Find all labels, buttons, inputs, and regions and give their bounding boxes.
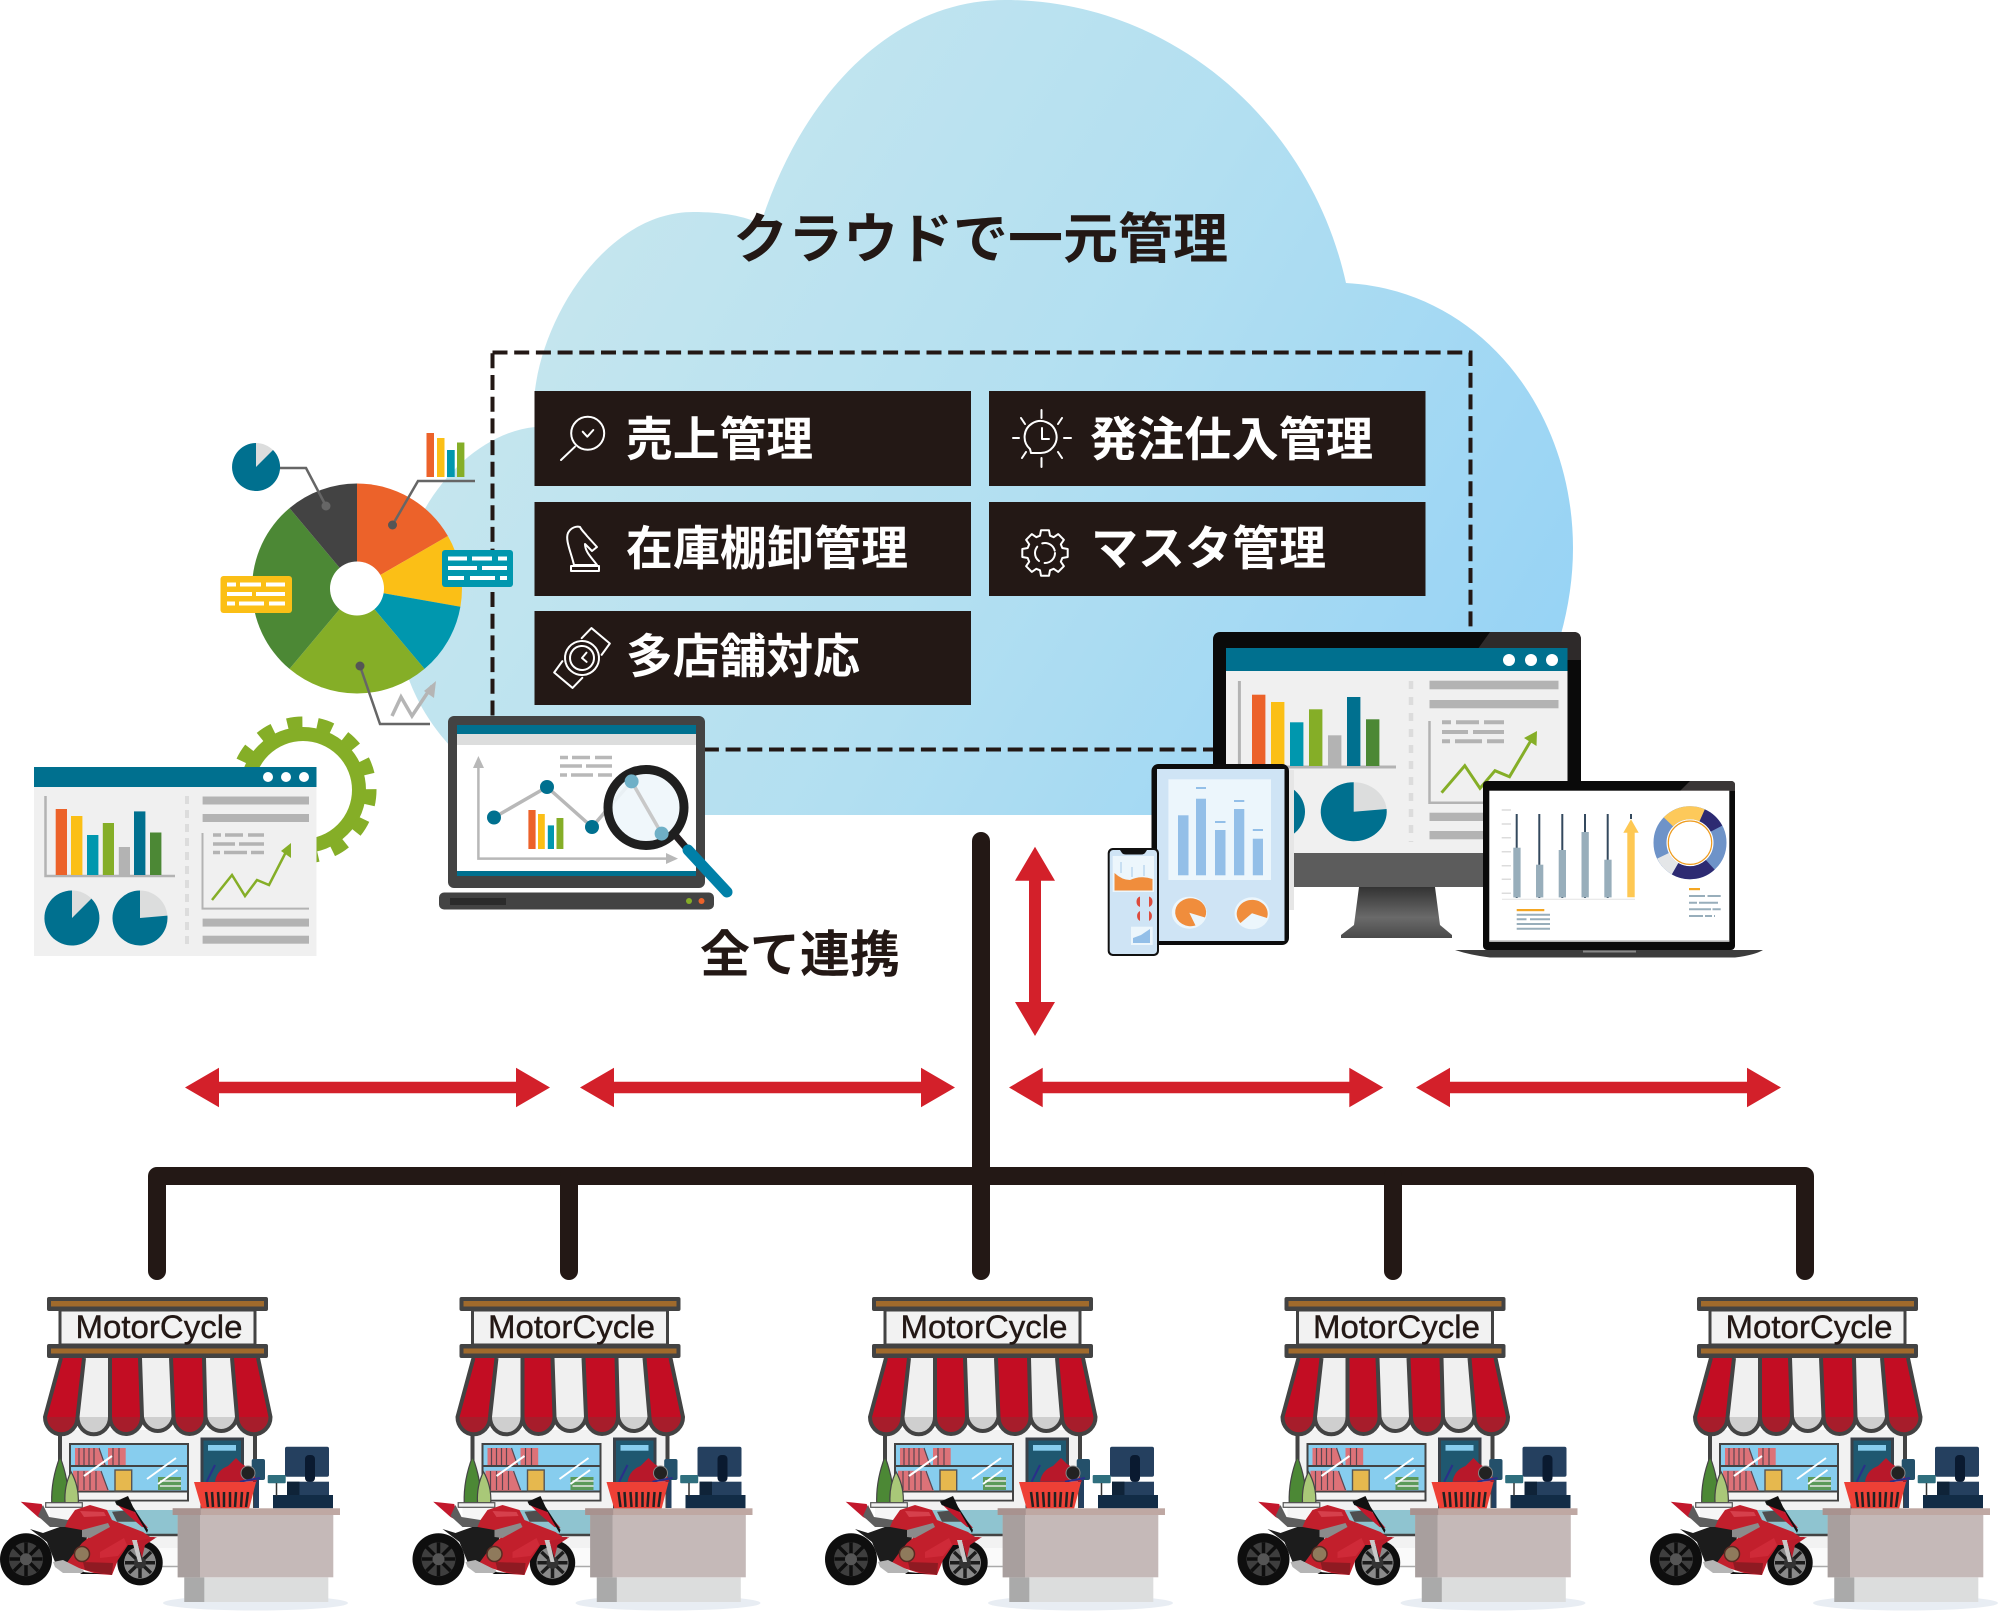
bar chart — [46, 796, 175, 876]
line chart — [473, 756, 678, 864]
store 5 — [1650, 1297, 1998, 1610]
pie charts — [1239, 782, 1387, 841]
dashboard window — [34, 767, 316, 956]
store 4: MotorCycle — [1313, 1309, 1480, 1345]
tablet — [1152, 764, 1294, 945]
store 3 — [825, 1297, 1173, 1610]
mini bars with leader — [388, 433, 475, 530]
pie charts — [44, 890, 168, 946]
green gear — [236, 723, 370, 857]
laptop with magnifier — [439, 716, 727, 910]
pie chart infographic — [220, 433, 513, 724]
icon: gear — [1022, 530, 1068, 576]
trend arrow with leader — [356, 662, 436, 724]
feature: 発注仕入管理 — [989, 391, 1426, 486]
bar chart — [1239, 681, 1396, 767]
store 4 — [1238, 1297, 1586, 1610]
icon: wristwatch — [550, 625, 614, 691]
feature: 売上管理 — [534, 391, 971, 486]
feature: 売上管理: 売上管理 — [626, 413, 813, 466]
desktop monitor — [1213, 632, 1581, 938]
pie slices — [252, 484, 462, 693]
connection bus lines — [157, 841, 1805, 1271]
donut chart — [1660, 813, 1720, 873]
notebook legends — [1517, 888, 1721, 929]
icon: light bulb clock — [1013, 410, 1071, 467]
icon: chess knight — [567, 527, 599, 571]
feature: 在庫棚卸管理: 在庫棚卸管理 — [626, 522, 908, 575]
tablet bars — [1178, 787, 1263, 875]
yellow text card — [220, 576, 292, 613]
red horizontal double arrow 1 — [185, 1068, 550, 1107]
store 3: MotorCycle — [900, 1309, 1068, 1345]
red horizontal double arrow 4 — [1416, 1068, 1781, 1107]
store 5: MotorCycle — [1726, 1309, 1892, 1345]
teal text card — [442, 550, 513, 587]
notebook bar chart — [1502, 810, 1639, 899]
background cloud — [397, 0, 1573, 815]
icon: magnifier with check — [561, 417, 604, 460]
notebook computer — [1455, 781, 1763, 958]
dashed system boundary — [492, 352, 1470, 750]
store 1 — [0, 1297, 348, 1610]
tablet pies — [1172, 897, 1270, 929]
red horizontal double arrow 2 — [580, 1068, 955, 1107]
feature: 多店舗対応 — [534, 611, 971, 705]
text bars and line chart — [202, 796, 309, 944]
store 2: MotorCycle — [488, 1309, 655, 1345]
feature: マスタ管理 — [989, 502, 1426, 596]
text bars and line chart — [1430, 681, 1558, 839]
feature: 多店舗対応: 多店舗対応 — [626, 630, 860, 683]
magnifier — [608, 770, 727, 892]
label: 全て連携: 全て連携 — [700, 927, 900, 983]
small pie with leader — [232, 443, 330, 510]
store 2 — [412, 1297, 760, 1610]
feature: 在庫棚卸管理 — [534, 502, 971, 596]
red vertical double arrow — [1015, 847, 1055, 1036]
store 1: MotorCycle — [76, 1309, 242, 1345]
feature: 発注仕入管理: 発注仕入管理 — [1090, 413, 1373, 466]
red horizontal double arrow 3 — [1009, 1068, 1383, 1107]
smartphone — [1108, 848, 1159, 956]
title: クラウドで一元管理 — [733, 209, 1228, 270]
feature: マスタ管理: マスタ管理 — [1091, 522, 1326, 575]
